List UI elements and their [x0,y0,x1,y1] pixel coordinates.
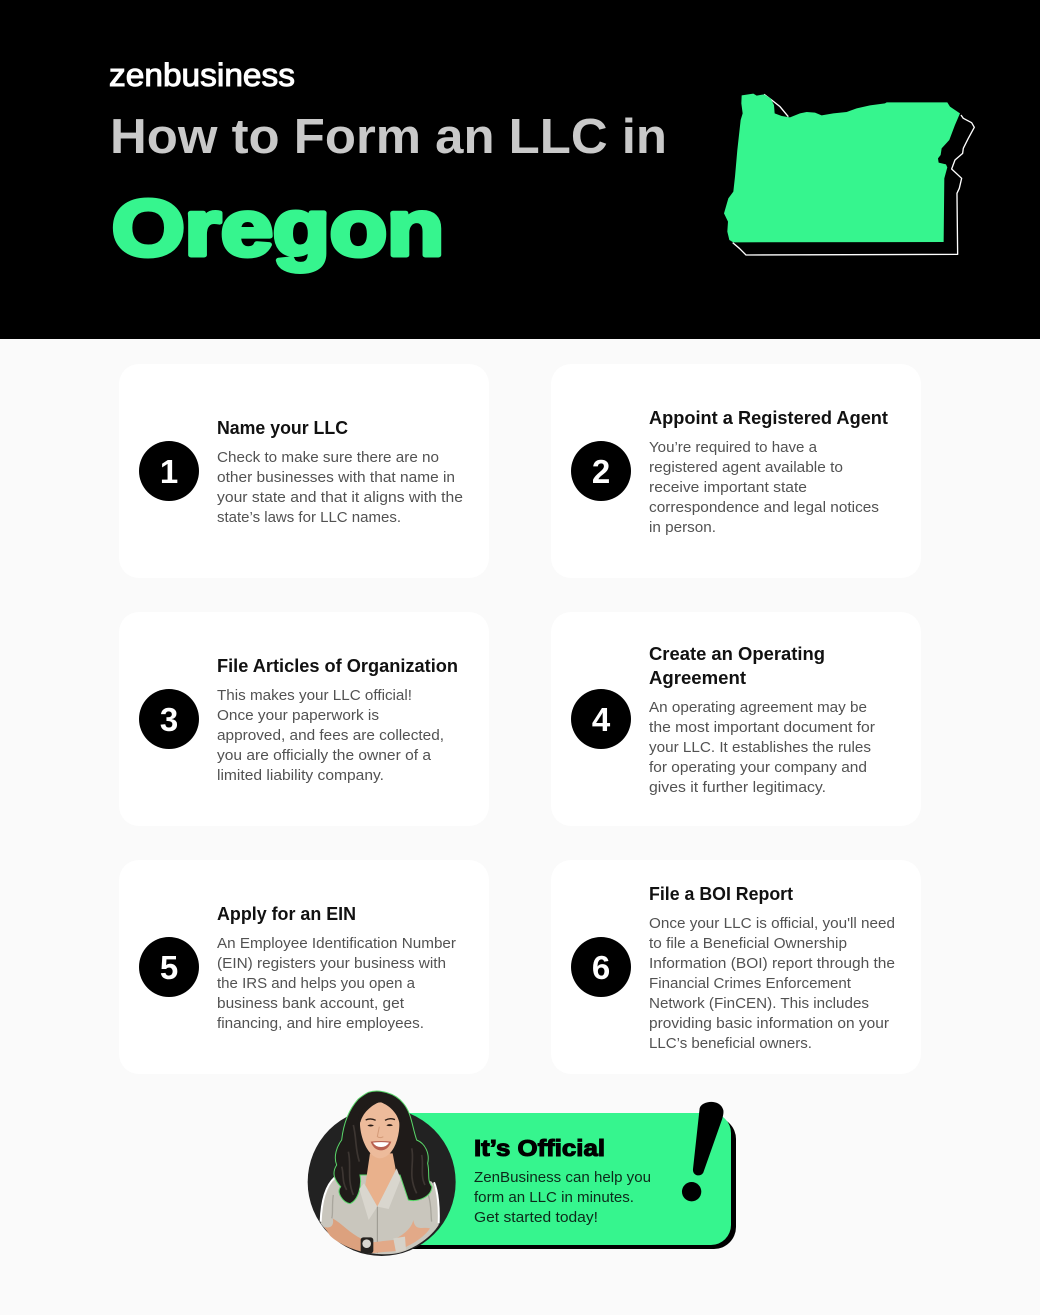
step card 3: File Articles of Organization: you are officially the owner of a [217,748,432,764]
step card 4: Create an Operating Agreement: An operating agreement may be [649,700,867,716]
step card 6: File a BOI Report: providing basic information on your [649,1016,889,1032]
icon: Oregon state map [724,94,974,255]
icon: exclamation mark [682,1102,723,1201]
step card 4: Create an Operating Agreement: Agreement [649,667,746,688]
step card 6: File a BOI Report [551,860,921,1074]
step card 1: Name your LLC: Check to make sure there are no [217,450,439,466]
step card 2: Appoint a Registered Agent: Appoint a Registered Agent [649,407,888,428]
step card 5: Apply for an EIN: financing, and hire employees. [217,1016,424,1032]
step card 4: Create an Operating Agreement: your LLC. It establishes the rules [649,740,871,756]
step card 6: File a BOI Report: Financial Crimes Enforcement [649,976,851,992]
step card 2: Appoint a Registered Agent: in person. [649,520,716,536]
heading: It's Official: It’s Official [474,1135,605,1161]
title: Oregon: Oregon [112,183,444,272]
step card 6: File a BOI Report: Once your LLC is official, you'll need [649,916,895,932]
callout text: ZenBusiness can help you [474,1170,651,1186]
banner background [390,1113,736,1249]
step card 2: Appoint a Registered Agent: registered agent available to [649,460,843,476]
title: How to Form an LLC in: How to Form an LLC in [110,110,667,164]
step card 3: File Articles of Organization: limited liability company. [217,768,384,784]
step card 4: Create an Operating Agreement: the most important document for [649,720,875,736]
step card 2: Appoint a Registered Agent: You’re required to have a [649,440,818,456]
step card 4: Create an Operating Agreement: gives it further legitimacy. [649,780,826,796]
logo: zenbusiness: zenbusiness [109,57,295,93]
step card 2: Appoint a Registered Agent [551,364,921,578]
step card 3: File Articles of Organization [119,612,489,826]
step card 5: Apply for an EIN: the IRS and helps you open a [217,976,416,992]
step card 6: File a BOI Report: to file a Beneficial Ownership [649,936,847,952]
step card 6: File a BOI Report: Information (BOI) report through the [649,956,895,972]
step card 2: Appoint a Registered Agent: receive important state [649,480,807,496]
step card 3: File Articles of Organization: 3 [160,701,178,738]
step card 6: File a BOI Report: File a BOI Report [649,883,793,904]
step card 4: Create an Operating Agreement: 4 [592,701,611,738]
step card 4: Create an Operating Agreement: Create an Operating [649,643,825,664]
step card 1: Name your LLC: state’s laws for LLC names. [217,510,401,526]
step card 5: Apply for an EIN: An Employee Identification Number [217,936,456,952]
step card 4: Create an Operating Agreement: for operating your company and [649,760,867,776]
step card 2: Appoint a Registered Agent: correspondence and legal notices [649,500,879,516]
callout text [474,1170,651,1226]
step card 6: File a BOI Report: LLC’s beneficial owners. [649,1036,812,1052]
step card 2: Appoint a Registered Agent: 2 [592,453,610,490]
header band [0,0,1040,339]
step card 1: Name your LLC [119,364,489,578]
step card 3: File Articles of Organization: Once your paperwork is [217,708,379,724]
step card 1: Name your LLC: your state and that it aligns with the [217,490,463,506]
step card 5: Apply for an EIN: 5 [160,949,178,986]
step card 5: Apply for an EIN: Apply for an EIN [217,903,356,924]
step card 6: File a BOI Report: Network (FinCEN). This includes [649,996,869,1012]
step card 5: Apply for an EIN [119,860,489,1074]
step card 1: Name your LLC: Name your LLC [217,417,348,438]
step card 3: File Articles of Organization: This makes your LLC official! [217,688,412,704]
callout text: form an LLC in minutes. [474,1190,634,1206]
call to action banner [308,1091,736,1256]
step card 6: File a BOI Report: 6 [592,949,610,986]
step card 5: Apply for an EIN: business bank account, get [217,996,404,1012]
step card 3: File Articles of Organization: File Articles of Organization [217,655,458,676]
step card 1: Name your LLC: 1 [160,453,178,490]
step card 5: Apply for an EIN: (EIN) registers your business with [217,956,446,972]
step card 1: Name your LLC: other businesses with that name in [217,470,455,486]
callout text: Get started today! [474,1210,598,1226]
step card 3: File Articles of Organization: approved, and fees are collected, [217,728,444,744]
portrait of smiling woman [308,1091,456,1256]
step card 4: Create an Operating Agreement [551,612,921,826]
